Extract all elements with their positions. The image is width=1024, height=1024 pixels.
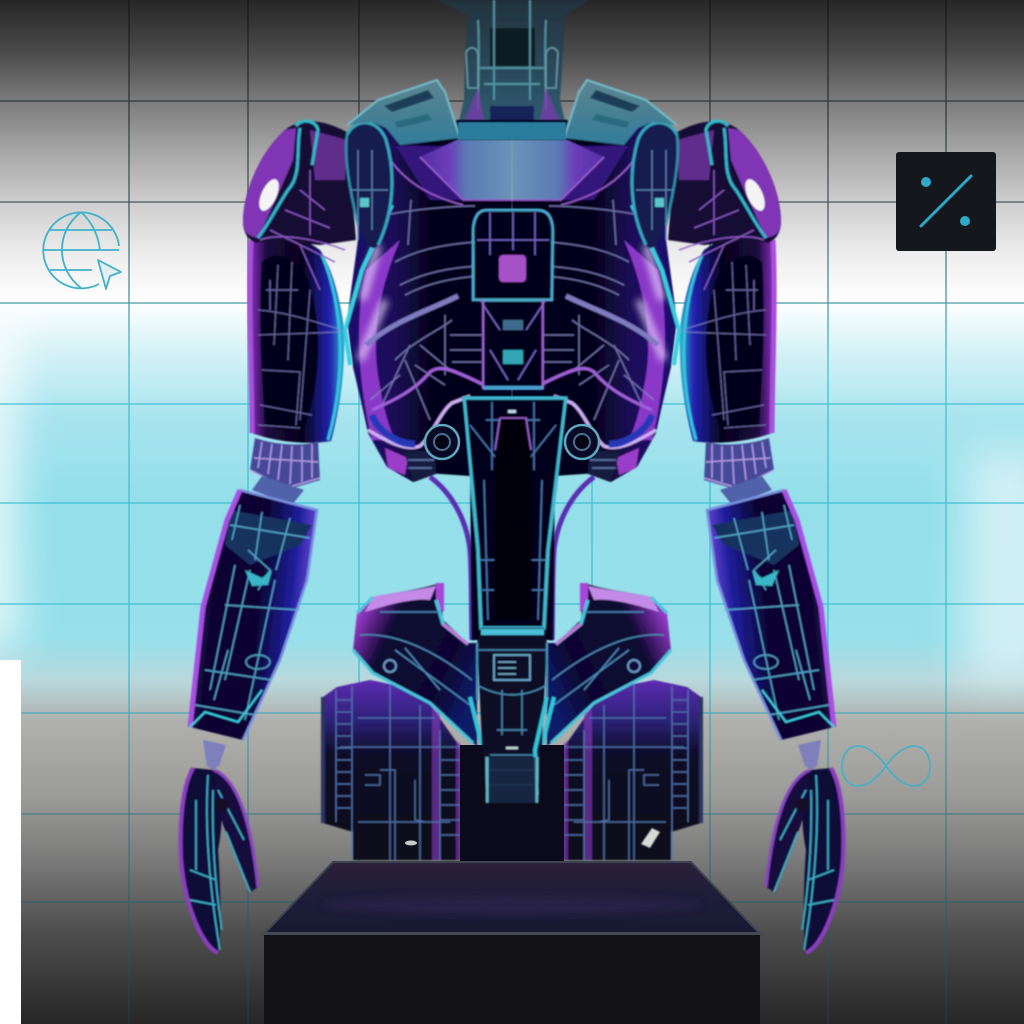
chest center module bbox=[473, 210, 553, 388]
white haze at page edges bbox=[0, 310, 1024, 680]
right wheel cut-out bbox=[641, 828, 660, 848]
left wheel bbox=[323, 680, 461, 860]
icon: infinity bbox=[842, 746, 930, 786]
left collar plate bbox=[347, 80, 460, 145]
left shoulder pad oval bbox=[346, 123, 392, 248]
lower body block bbox=[460, 745, 564, 862]
left shoulder cap bbox=[243, 121, 356, 290]
left hip cable bbox=[430, 477, 472, 640]
neck bbox=[437, 0, 590, 125]
shoulder-hip joints bbox=[425, 425, 599, 459]
joint centers bbox=[434, 434, 590, 450]
left half of robot bbox=[180, 80, 512, 953]
spine bbox=[462, 396, 567, 640]
icon: percent tile bbox=[896, 152, 996, 251]
left hand bbox=[180, 740, 258, 953]
pelvis center bbox=[477, 628, 547, 803]
left elbow joint bbox=[250, 438, 320, 505]
left upper arm bbox=[250, 236, 344, 443]
base plinth bbox=[264, 862, 760, 1024]
right half of robot (mirror) bbox=[512, 80, 844, 953]
left pelvis wing bbox=[353, 583, 487, 800]
white strip at lower left edge bbox=[0, 660, 21, 1024]
left wheel cut-out bbox=[405, 840, 417, 846]
icon: globe with cursor bbox=[43, 212, 121, 289]
collar center band bbox=[458, 122, 566, 140]
left torso bbox=[345, 120, 512, 482]
left forearm bbox=[190, 490, 317, 740]
